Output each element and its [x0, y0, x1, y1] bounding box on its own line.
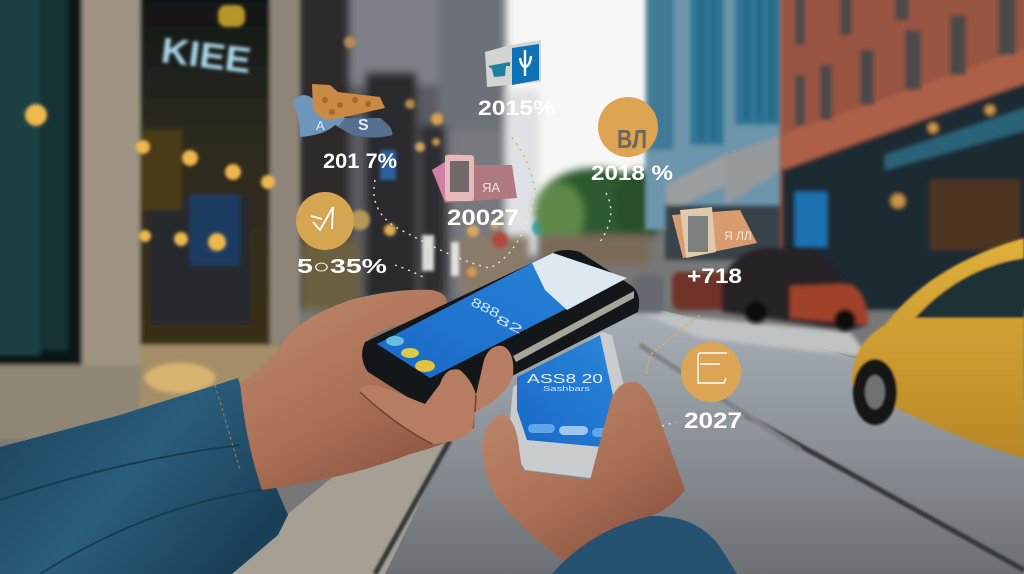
right hand [482, 382, 685, 565]
lower phone: Sashbars [543, 386, 591, 393]
icon: pink card: ЯA [482, 180, 500, 195]
left hand fingers [360, 346, 513, 444]
upper phone [362, 250, 639, 410]
icon: cookie and blue wallet [293, 84, 392, 138]
background: neon sign: KIEE [159, 29, 253, 81]
upper phone: 82 [494, 312, 526, 337]
lower phone text: ASS8 20 [527, 371, 603, 386]
upper phone app icons [386, 336, 435, 372]
background: sky [480, 0, 680, 210]
background: center buildings [285, 0, 539, 310]
label: 2027: 2027 [684, 408, 742, 433]
upper phone metal edge [513, 291, 634, 362]
lower phone body [510, 332, 626, 478]
icon: cookie and blue wallet: S [358, 117, 369, 134]
background: red and dark cars [632, 248, 868, 331]
upper phone screen [377, 253, 627, 378]
background: brick building [780, 0, 1024, 310]
background: center bokeh lights [344, 36, 580, 277]
background: blue glass buildings [645, 0, 785, 260]
left denim sleeve [0, 378, 288, 574]
background: tram tracks [375, 345, 1024, 574]
label: 2015 percent: 2015% [478, 97, 555, 120]
icon: gold circle document [681, 342, 741, 402]
right denim sleeve [552, 516, 737, 574]
label: 5035 percent: 5○35% [297, 256, 387, 278]
label: 2018 percent: 2018 % [591, 162, 673, 185]
label: +718: +718 [687, 265, 742, 288]
lower phone buttons [528, 424, 613, 437]
lower phone screen [517, 335, 614, 447]
icon: gold circle check [296, 192, 354, 250]
background: left storefront [0, 0, 300, 440]
icon: pink card [432, 154, 517, 203]
yellow taxi [852, 238, 1024, 458]
icon: gold circle letters [598, 97, 658, 157]
icon: gold circle letters: BЛ [617, 124, 647, 154]
label: 20027: 20027 [447, 205, 519, 230]
lower phone [510, 332, 626, 478]
icon: tan card: Я ЛЛ [724, 229, 752, 243]
icon: tan card [672, 207, 757, 258]
background: glowing lights [25, 5, 275, 251]
left hand palm [240, 290, 476, 490]
icon: blue sign card [485, 40, 541, 87]
icon: cookie and blue wallet: A [316, 118, 325, 133]
label: 2017 percent: 201 7% [323, 150, 397, 173]
dotted connector lines [374, 135, 700, 426]
background: trees [535, 168, 666, 265]
upper phone digits: 888 [469, 294, 502, 321]
background: road and sidewalk [215, 305, 1024, 574]
upper phone body [362, 250, 639, 410]
upper phone glare [532, 253, 627, 310]
